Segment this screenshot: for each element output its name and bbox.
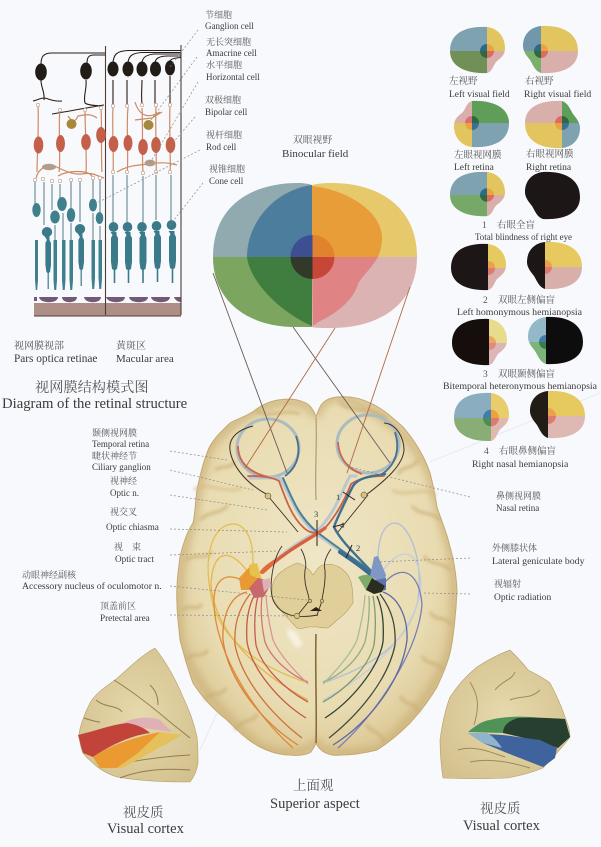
label: right visual cortex: Visual cortex bbox=[463, 818, 541, 834]
label: accessory nucleus of oculomotor nerve: 动眼神经副核 bbox=[22, 569, 77, 580]
label: rod cell: Rod cell bbox=[206, 142, 237, 152]
label: total blindness: 1 bbox=[482, 221, 487, 231]
brain right labels bbox=[492, 490, 585, 603]
label: optic chiasma: Optic chiasma bbox=[106, 522, 159, 532]
label: ciliary ganglion: 睫状神经节 bbox=[92, 450, 137, 461]
panel: visual field defect series bbox=[450, 26, 585, 441]
label: optic nerve: Optic n. bbox=[110, 488, 139, 498]
optic nerves and tracts bbox=[248, 474, 385, 574]
label: pretectal area: Pretectal area bbox=[100, 613, 150, 623]
label: nasal retina bbox=[496, 490, 541, 513]
label: lateral geniculate body: Lateral geniculate body bbox=[492, 556, 585, 567]
field: homonymous right bbox=[527, 242, 582, 290]
label: temporal retina bbox=[92, 427, 149, 449]
label: nasal retina: 鼻侧视网膜 bbox=[496, 490, 541, 501]
label: amacrine cell: 无长突细胞 bbox=[206, 36, 251, 47]
label: total blindness: 右眼全盲 bbox=[497, 219, 536, 231]
label: bipolar cell: 双极细胞 bbox=[205, 94, 241, 105]
label: right retina: 右眼视网膜 bbox=[526, 148, 574, 160]
label: left homonymous hemianopsia: 2 bbox=[483, 296, 488, 306]
section frame lines bbox=[34, 45, 181, 316]
label: optic tract: 视 束 bbox=[114, 541, 141, 552]
bipolar cells bbox=[34, 127, 175, 155]
ganglion cell axons bbox=[33, 50, 181, 114]
projection green bbox=[468, 717, 570, 747]
chart: binocular visual field bbox=[213, 183, 417, 328]
label: binocular field: Binocular field bbox=[282, 148, 349, 160]
globe bbox=[237, 419, 299, 477]
field: homonymous left bbox=[451, 244, 506, 290]
label: right visual cortex bbox=[463, 800, 541, 834]
label: right nasal hemianopsia: Right nasal hemianopsia bbox=[472, 459, 569, 470]
edge shading bbox=[179, 397, 455, 753]
cone cells bbox=[42, 220, 176, 289]
brain outline bbox=[177, 397, 457, 755]
label: accessory nucleus of oculomotor nerve: Accessory nucleus of oculomotor n. bbox=[22, 581, 162, 592]
label: nasal retina: Nasal retina bbox=[496, 503, 539, 513]
label: right visual field: Right visual field bbox=[524, 89, 591, 100]
label: cone cell: Cone cell bbox=[209, 176, 244, 186]
projection light blue bbox=[468, 733, 502, 748]
label: pars optica retinae: Pars optica retinae bbox=[14, 353, 97, 365]
label: optic tract bbox=[114, 541, 154, 564]
field: total blindness left eye normal bbox=[450, 172, 505, 216]
horizontal cells bbox=[42, 160, 156, 170]
label: macular area: Macular area bbox=[116, 353, 174, 365]
brain leader lines bbox=[170, 451, 470, 616]
right lateral geniculate body bbox=[358, 556, 386, 594]
brain left labels bbox=[22, 427, 162, 623]
field: right retina bbox=[525, 100, 580, 148]
cortical shading bbox=[182, 402, 452, 742]
label: bitemporal heteronymous hemianopsia: 3 bbox=[483, 370, 488, 380]
sulci bbox=[84, 680, 190, 778]
label: superior aspect: Superior aspect bbox=[270, 796, 360, 812]
label: left visual cortex bbox=[107, 804, 185, 837]
label: superior aspect bbox=[270, 778, 360, 812]
label: lateral geniculate body: 外侧膝状体 bbox=[492, 542, 537, 553]
label: optic radiation: 视辐射 bbox=[494, 578, 521, 589]
label: right retina: Right retina bbox=[526, 163, 572, 173]
label: macular area: 黄斑区 bbox=[116, 339, 146, 352]
heading: retinal structure: Diagram of the retinal structure bbox=[2, 396, 188, 412]
label: horizontal cell: 水平细胞 bbox=[206, 59, 242, 70]
label: ganglion cell bbox=[205, 9, 254, 31]
label: left homonymous hemianopsia: Left homonymous hemianopsia bbox=[457, 307, 583, 318]
label: lateral geniculate body bbox=[492, 542, 585, 567]
label: right visual cortex: 视皮质 bbox=[480, 800, 521, 816]
label: ganglion cell: Ganglion cell bbox=[205, 21, 254, 31]
label: binocular field bbox=[282, 134, 349, 160]
label: bitemporal heteronymous hemianopsia: 双眼颞侧偏盲 bbox=[498, 368, 556, 380]
projection red bbox=[78, 723, 150, 757]
central macular field bbox=[290, 235, 334, 279]
label: optic chiasma: 视交叉 bbox=[110, 506, 137, 517]
field: left retina bbox=[454, 100, 509, 148]
retinal cell labels bbox=[205, 9, 260, 186]
label: optic nerve: 视神经 bbox=[110, 475, 137, 486]
label: superior aspect: 上面观 bbox=[293, 778, 334, 793]
lesion markers bbox=[314, 492, 360, 558]
rod cells bbox=[32, 197, 103, 290]
field: bitemporal left bbox=[452, 318, 507, 366]
projection yellow bbox=[117, 732, 182, 768]
projection orange bbox=[93, 732, 165, 768]
label: bitemporal heteronymous hemianopsia bbox=[443, 368, 598, 392]
field: total blindness right eye black bbox=[525, 172, 580, 220]
rod and cone connecting fibres bbox=[35, 175, 171, 240]
label: cone cell bbox=[209, 163, 245, 186]
right optic radiation bbox=[323, 523, 422, 748]
label: bitemporal heteronymous hemianopsia: Bitemporal heteronymous hemianopsia bbox=[443, 381, 598, 392]
label: right nasal hemianopsia: 4 bbox=[484, 447, 489, 457]
amacrine cells bbox=[66, 119, 154, 130]
label: left visual cortex: 视皮质 bbox=[123, 804, 164, 820]
label: amacrine cell: Amacrine cell bbox=[206, 48, 257, 58]
label: left visual field: Left visual field bbox=[449, 89, 510, 100]
label: pars optica retinae bbox=[14, 339, 97, 365]
label: ciliary ganglion: Ciliary ganglion bbox=[92, 462, 151, 472]
label: total blindness bbox=[475, 219, 572, 242]
label: rod cell: 视杆细胞 bbox=[206, 129, 242, 140]
label: left visual field bbox=[449, 75, 510, 100]
longitudinal fissure bbox=[315, 418, 317, 743]
label: optic tract: Optic tract bbox=[115, 554, 154, 564]
left lateral geniculate body bbox=[239, 563, 271, 598]
field: bitemporal right bbox=[528, 316, 583, 364]
right visual cortex bbox=[440, 650, 570, 779]
accessory nucleus bbox=[310, 607, 322, 611]
field: right nasal right bbox=[530, 390, 585, 438]
left optic radiation bbox=[208, 524, 308, 748]
lesion markers: 4 bbox=[340, 520, 345, 530]
heading: retinal structure: 视网膜结构模式图 bbox=[35, 379, 149, 396]
label: amacrine cell bbox=[206, 36, 257, 58]
projection pink bbox=[123, 718, 172, 732]
label: left homonymous hemianopsia bbox=[457, 294, 583, 318]
lesion markers: 2 bbox=[356, 543, 360, 553]
right eye bbox=[337, 415, 404, 495]
label: right nasal hemianopsia: 右眼鼻侧偏盲 bbox=[499, 445, 557, 457]
label: macular area bbox=[116, 339, 174, 365]
oculomotor pathway bbox=[265, 492, 368, 619]
pale patch bbox=[287, 628, 303, 648]
label: right visual field bbox=[524, 75, 591, 100]
label: left homonymous hemianopsia: 双眼左侧偏盲 bbox=[498, 294, 556, 306]
label: pretectal area bbox=[100, 600, 150, 623]
sulci bbox=[458, 672, 540, 768]
label: optic radiation bbox=[494, 578, 551, 603]
label: left retina: 左眼视网膜 bbox=[454, 149, 502, 161]
bipolar cell processes bbox=[36, 102, 177, 178]
label: optic chiasma bbox=[106, 506, 159, 532]
label: horizontal cell bbox=[206, 59, 260, 82]
ganglion cells bbox=[35, 60, 175, 80]
label: ciliary ganglion bbox=[92, 450, 151, 472]
label: accessory nucleus of oculomotor nerve bbox=[22, 569, 162, 592]
label: total blindness: Total blindness of right eye bbox=[475, 232, 572, 242]
bottom bands bbox=[34, 297, 181, 316]
label: right retina bbox=[526, 148, 574, 173]
label: optic nerve bbox=[110, 475, 139, 498]
label: right visual field: 右视野 bbox=[525, 75, 554, 87]
label: cone cell: 视锥细胞 bbox=[209, 163, 245, 174]
projected field lines bbox=[213, 273, 410, 473]
label: bipolar cell bbox=[205, 94, 248, 117]
lesion markers: 3 bbox=[314, 509, 318, 519]
synapse knobs bbox=[33, 103, 172, 183]
field: left visual field bbox=[450, 26, 505, 74]
label: optic radiation: Optic radiation bbox=[494, 593, 551, 603]
label: bipolar cell: Bipolar cell bbox=[205, 107, 248, 117]
midbrain section bbox=[272, 563, 353, 629]
projection dark green bbox=[503, 718, 570, 748]
label: temporal retina: Temporal retina bbox=[92, 439, 149, 449]
projection blue bbox=[468, 733, 557, 767]
globe bbox=[337, 415, 399, 473]
lesion markers: 1 bbox=[336, 492, 340, 502]
left visual cortex bbox=[78, 648, 198, 782]
label: right nasal hemianopsia bbox=[472, 445, 569, 470]
visual field labels bbox=[443, 75, 598, 470]
label: left retina bbox=[454, 149, 502, 173]
label: horizontal cell: Horizontal cell bbox=[206, 72, 260, 82]
label: ganglion cell: 节细胞 bbox=[205, 9, 232, 20]
label: binocular field: 双眼视野 bbox=[293, 134, 332, 146]
label: rod cell bbox=[206, 129, 242, 152]
label: left visual cortex: Visual cortex bbox=[107, 821, 185, 837]
panel: retinal structure diagram bbox=[32, 45, 181, 316]
field: right nasal left bbox=[454, 392, 509, 441]
inner field quadrants bbox=[247, 185, 382, 326]
label: pretectal area: 顶盖前区 bbox=[100, 600, 136, 611]
label: pars optica retinae: 视网膜视部 bbox=[14, 339, 64, 352]
label: left retina: Left retina bbox=[454, 162, 495, 173]
field: right visual field bbox=[523, 26, 578, 74]
brain, superior aspect bbox=[177, 273, 457, 755]
left eye bbox=[230, 419, 299, 495]
heading: retinal structure bbox=[2, 379, 188, 412]
retinal cell leader lines bbox=[93, 30, 203, 225]
label: left visual field: 左视野 bbox=[449, 75, 478, 87]
label: temporal retina: 颞侧视网膜 bbox=[92, 427, 137, 438]
